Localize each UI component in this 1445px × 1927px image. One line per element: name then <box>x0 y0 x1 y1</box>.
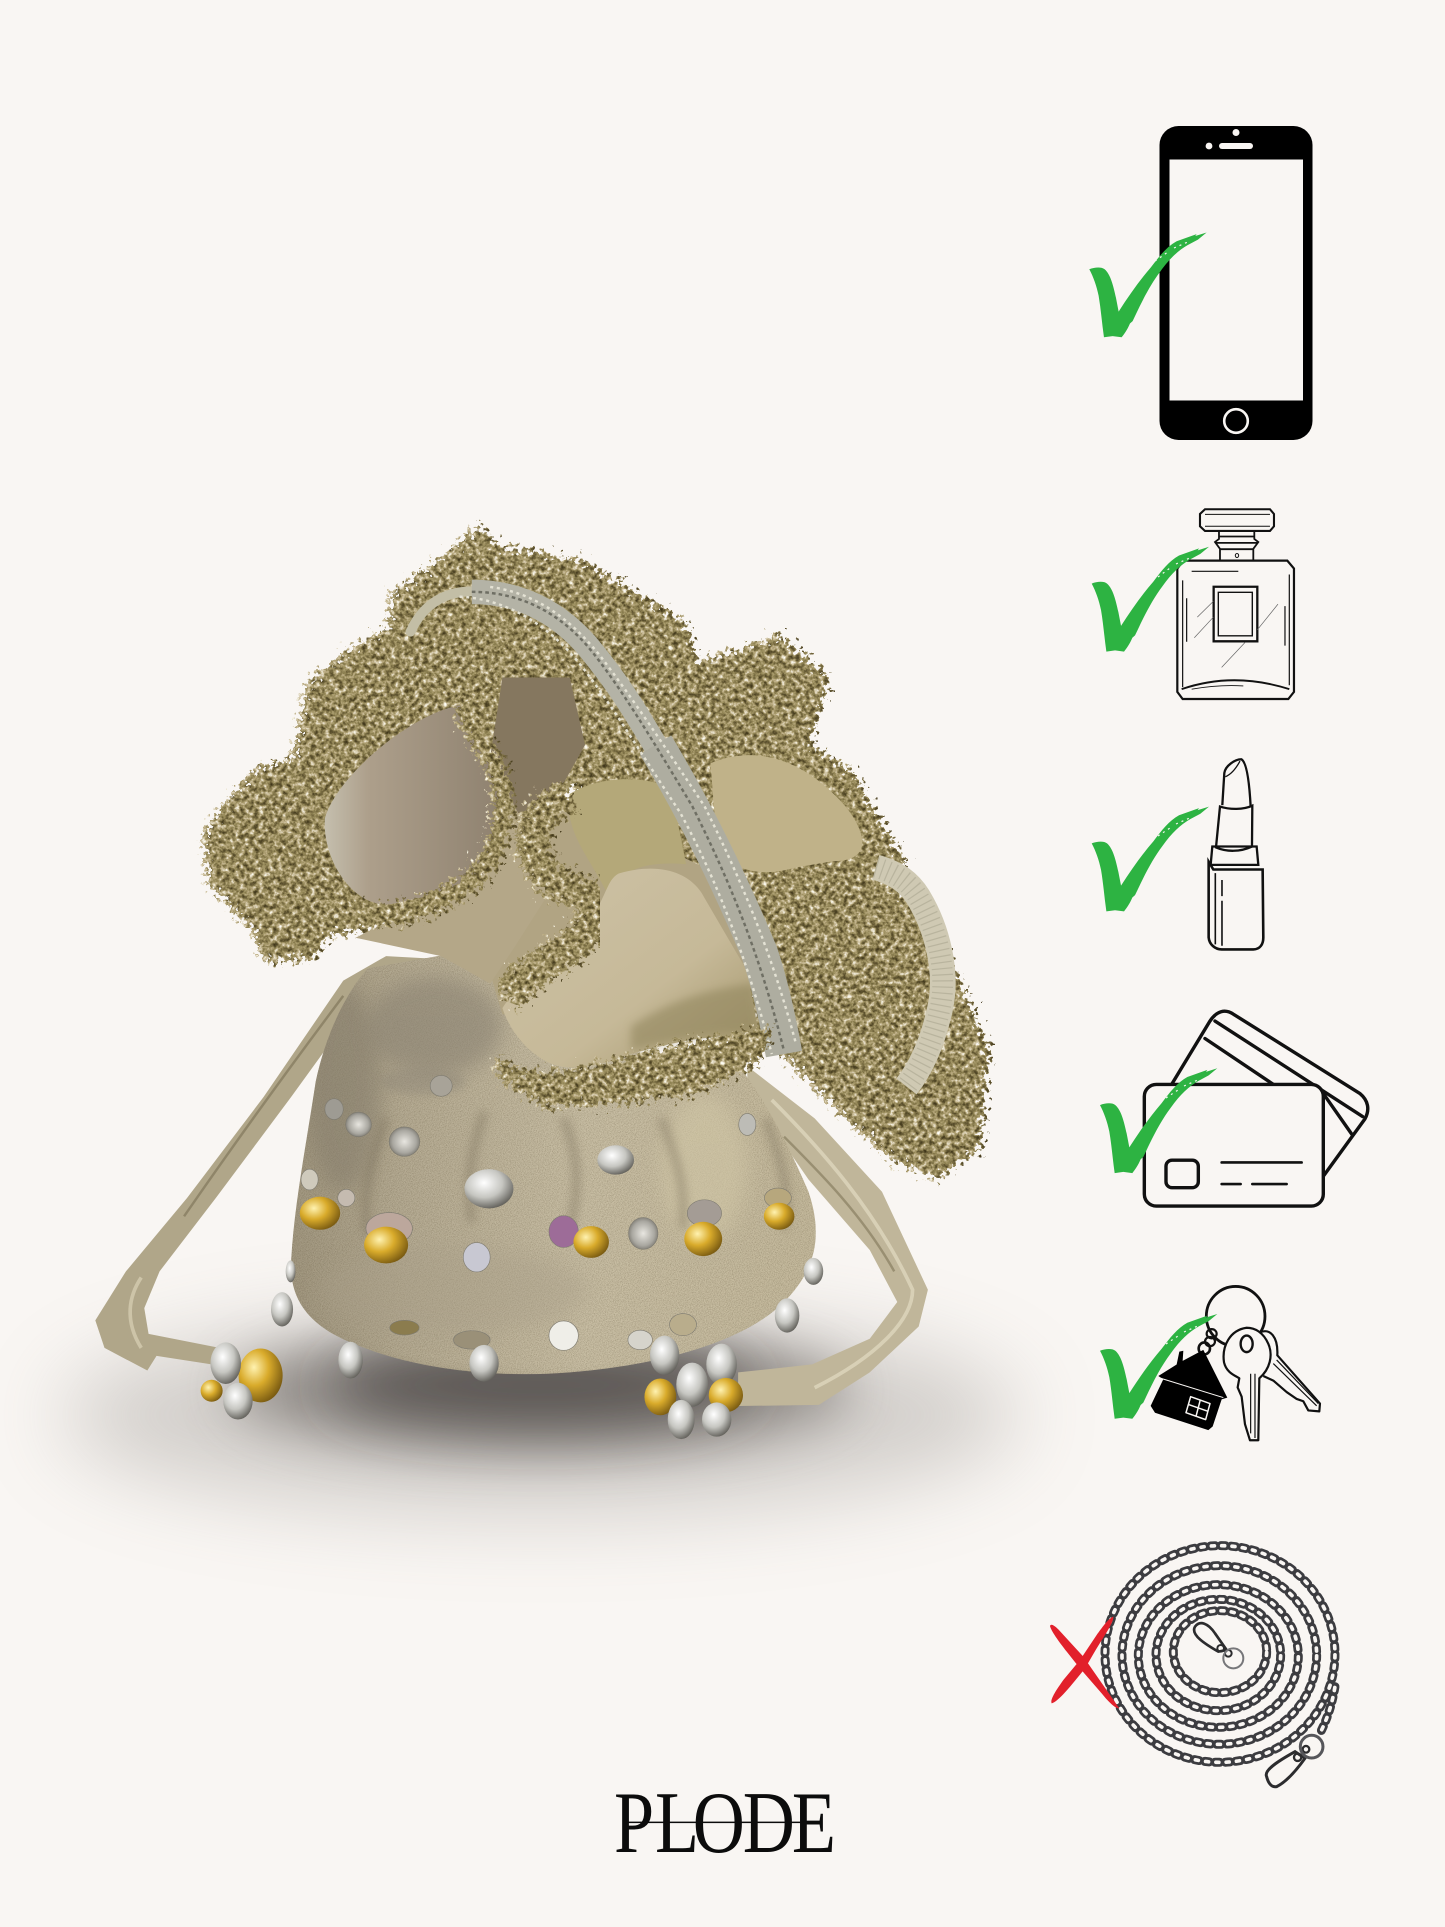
check mark: keys fit <box>1100 1314 1217 1419</box>
inner clasp <box>1194 1623 1243 1668</box>
right bell cluster <box>644 1344 743 1439</box>
olive lining centre <box>569 779 686 892</box>
bag body <box>291 956 816 1374</box>
cloth toward the tie <box>355 823 558 984</box>
fabric pleats <box>365 1112 786 1235</box>
sequins on body <box>301 1075 791 1350</box>
left bell cluster <box>201 1342 283 1420</box>
check mark: perfume fits <box>1092 547 1209 652</box>
icon: payment cards <box>1144 1011 1368 1206</box>
right strap loop <box>876 867 943 1086</box>
right lining <box>711 755 862 872</box>
silver braid strap <box>411 587 796 1054</box>
icon: house keys <box>1151 1286 1320 1440</box>
middle lace ruffle <box>505 797 593 999</box>
inner recess <box>490 678 585 818</box>
flap shadow fold <box>631 984 760 1051</box>
check mark: smartphone fits <box>1089 232 1207 337</box>
left ruffle inner lining <box>325 705 499 905</box>
lace ruffle, main band <box>202 524 989 1180</box>
icon: perfume bottle <box>1177 509 1294 699</box>
chain links: pale centres <box>1105 1546 1335 1762</box>
left drawstring <box>95 956 441 1371</box>
jingle bells on body <box>271 1145 823 1382</box>
icon: lipstick <box>1209 759 1263 949</box>
ground shadow under bag <box>60 1315 1020 1515</box>
inner cloth backing <box>484 763 760 1039</box>
front flap lining <box>502 869 760 1067</box>
icon: smartphone <box>1160 126 1312 440</box>
chain links: dark outer <box>1105 1546 1335 1762</box>
check mark: lipstick fits <box>1092 807 1209 911</box>
product photo: sequinned potli bag <box>95 524 989 1439</box>
icon: coiled metal chain strap <box>1105 1546 1335 1787</box>
logo: PLODE wordmark: PLODE <box>614 1774 836 1872</box>
right drawstring <box>738 1066 928 1406</box>
left ruffle lace lip <box>325 705 503 916</box>
cross mark: chain not included <box>1050 1617 1119 1708</box>
outer clasp <box>1266 1735 1323 1787</box>
check mark: cards fit <box>1100 1068 1217 1173</box>
lower front lace fringe <box>496 1028 772 1109</box>
